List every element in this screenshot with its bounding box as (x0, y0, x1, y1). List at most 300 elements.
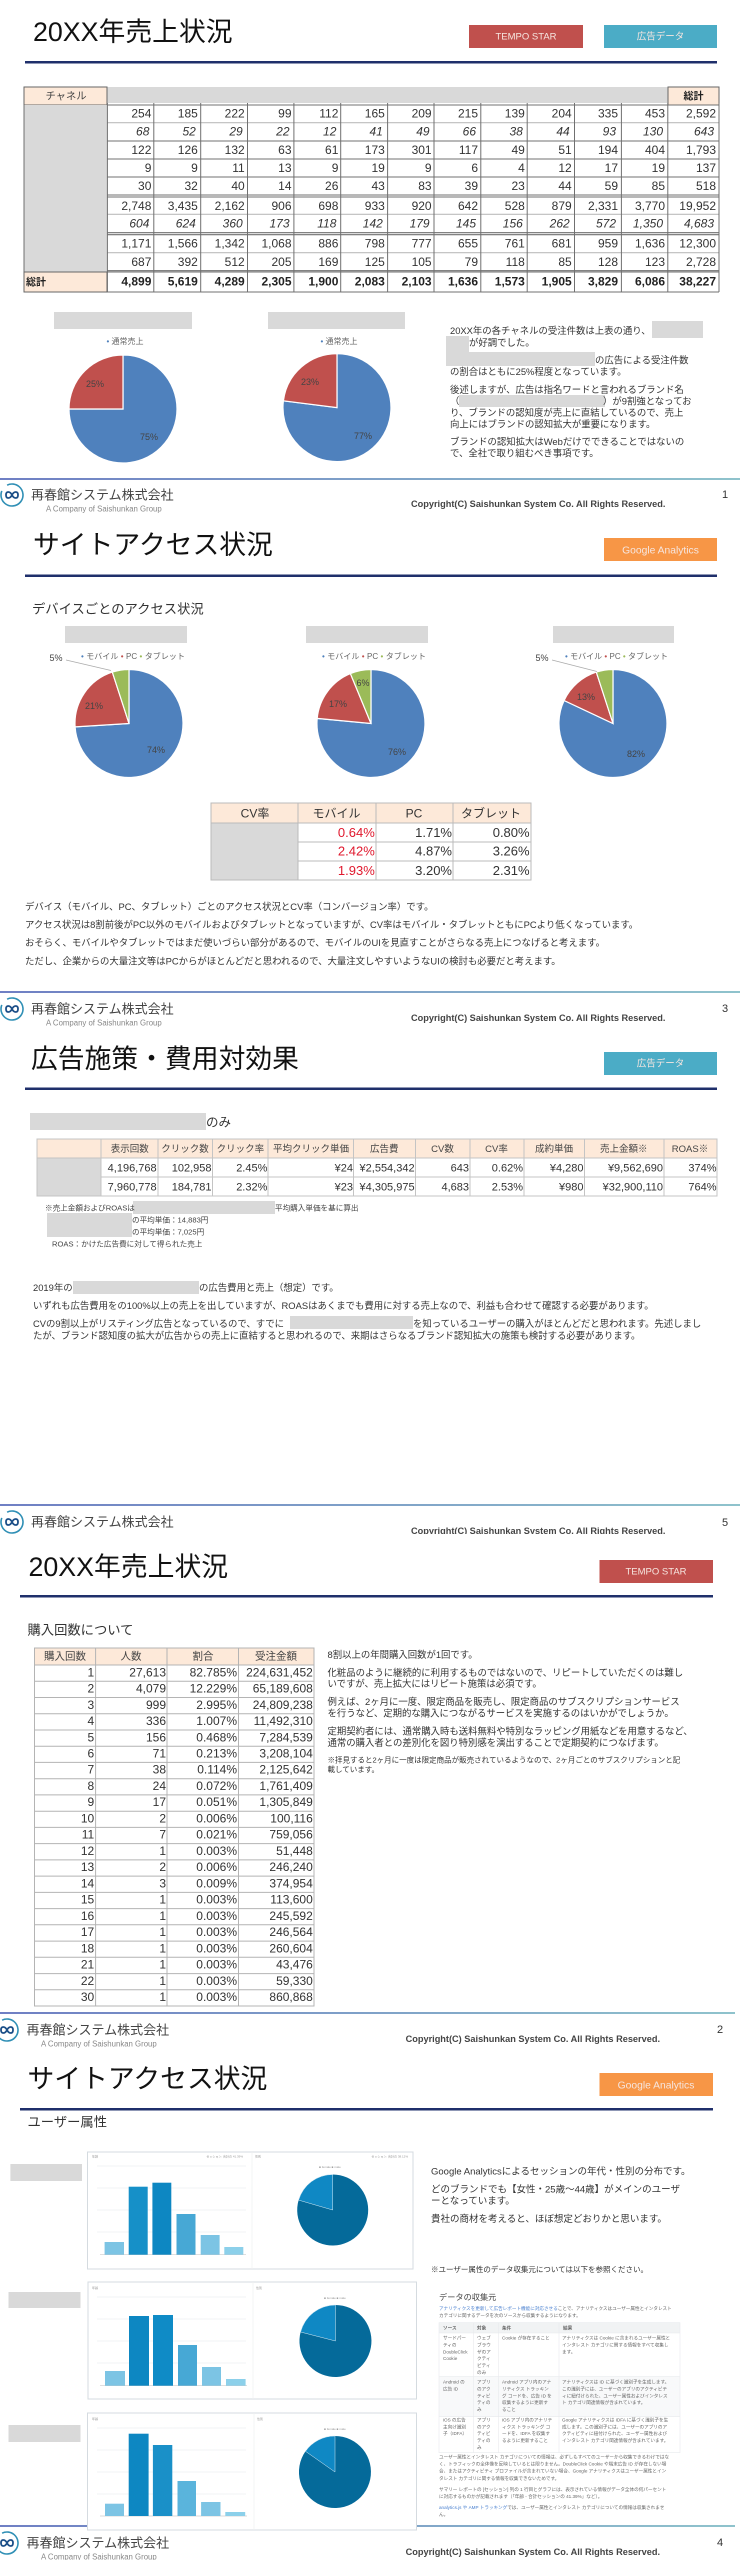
row 4 (145, 161, 716, 175)
row 9: 125 (365, 255, 385, 269)
row 7: 179 (410, 217, 430, 231)
panel: data collection sources: タレスト カテゴリに関する情報を収集できないためです。 (439, 2475, 559, 2482)
table: purchase count distribution: 113,600 (270, 1893, 313, 1907)
table: purchase count distribution: 購入回数 (44, 1650, 86, 1662)
analytics panel 2: 性別 (256, 2285, 262, 2290)
source table: ティビ (477, 2430, 491, 2437)
table: purchase count distribution: 71 (153, 1746, 166, 1760)
pie chart: device access 3: 5% (535, 653, 549, 663)
total row: 3,829 (588, 275, 618, 289)
pie chart: device access 2: 76% (388, 747, 406, 757)
table: purchase count distribution: 336 (146, 1714, 166, 1728)
row 1: 185 (178, 107, 198, 121)
commentary: repeat purchases: 定期契約者には、通常購入時も送料無料や特別なラッピング用紙などを用意するなど、 (328, 1726, 693, 1736)
analytics panel 3: ■ female ■ male (324, 2427, 346, 2431)
table: purchase count distribution: 21 (81, 1958, 95, 1972)
analytics panel 1 (88, 2152, 413, 2269)
total row: 38,227 (679, 275, 716, 289)
table: purchase count distribution: 6 (88, 1746, 95, 1760)
table: purchase count distribution: 0.003% (196, 1941, 237, 1955)
table footnotes: の平均単価：14,883円 (132, 1215, 208, 1225)
commentary: repeat purchases: を行うなど、定期的な購入につながるサービスを実施するのはいかがでしょうか。 (328, 1708, 674, 1718)
row 3: 61 (325, 143, 339, 157)
row 7: 624 (176, 217, 196, 231)
pie chart: left channel: 25% (86, 379, 104, 389)
table: purchase count distribution: 割合 (192, 1650, 214, 1662)
commentary: user attributes: どのブランドでも【女性・25歳～44歳】がメインのユーザ (431, 2183, 680, 2195)
row 2: 130 (643, 125, 663, 139)
table: CV rate by device: 2.31% (493, 863, 530, 878)
title: site access status: サイトアクセス状況 (28, 2064, 267, 2094)
commentary: ad results (33, 1281, 701, 1341)
table footnotes (45, 1201, 359, 1249)
commentary: device access: アクセス状況は8割前後がPC以外のモバイルおよびタブレットとなっていますが、CV率はモバイル・タブレットともにPCより低くなっています。 (25, 919, 638, 930)
commentary: repeat purchases: 例えば、2ヶ月に一度、限定商品を販売し、限定商品のサブスクリプションサービス (328, 1696, 680, 1707)
source table: 主向け識別 (443, 2423, 466, 2430)
commentary: ad results: いずれも広告費用をの100%以上の売上を出していますが、ROASはあくまでも費用に対する売上なので、利益も合わせて確認する必要があります。 (33, 1300, 654, 1311)
row 8: 1,636 (635, 237, 665, 251)
source table: ティの (477, 2400, 491, 2406)
table: purchase count distribution: 24 (153, 1779, 166, 1793)
row 7: 262 (549, 217, 570, 231)
note: data source reference: ※ユーザー属性のデータ収集元については以下を参照ください。 (431, 2264, 648, 2274)
total row: 1,905 (542, 275, 572, 289)
row 7: 1,350 (633, 217, 663, 231)
commentary: user attributes: ーとなっています。 (431, 2196, 515, 2207)
row 6: 698 (318, 199, 339, 213)
row 7: 173 (269, 217, 290, 231)
footer: company logo, page 3: 3 (722, 1003, 728, 1015)
table: CV rate by device: CV率 (241, 806, 269, 820)
row 6: 2,162 (215, 199, 245, 213)
panel: data collection sources: に対応するものかが記載されます（「年齢 - 合計セッションの 41.39%」など）。 (439, 2493, 602, 2500)
row 8: 798 (365, 237, 385, 251)
source table: アプリ (477, 2418, 491, 2424)
table: purchase count distribution: 260,604 (269, 1941, 313, 1955)
row 3: 63 (278, 143, 292, 157)
row 4: 137 (696, 161, 716, 175)
table: CV rate by device: 1.93% (338, 863, 375, 878)
table: ad performance: クリック率 (217, 1144, 264, 1155)
button: ad data: 広告データ (637, 30, 684, 42)
row 4: 19 (371, 161, 385, 175)
table: purchase count distribution: 7 (159, 1828, 166, 1842)
row 1: 222 (225, 107, 245, 121)
source table: ること (502, 2407, 516, 2412)
row 7: 572 (596, 217, 616, 231)
row 5 (138, 179, 716, 193)
row 7: 156 (503, 217, 523, 231)
commentary: user attributes (431, 2165, 691, 2225)
title: 20XX sales status: 20XX年売上状況 (28, 1552, 228, 1582)
gender pie (297, 2174, 368, 2246)
row 1: 112 (319, 107, 339, 121)
total row: 5,619 (168, 275, 198, 289)
row 3: 301 (412, 143, 432, 157)
table: purchase count distribution: 0.006% (196, 1860, 237, 1874)
source table: ます。 (562, 2348, 575, 2355)
source table: DoubleClick (443, 2349, 468, 2354)
table: purchase count distribution: 1 (159, 1844, 166, 1858)
source table: この識別子には、ユーザーのアプリのアクティビテ (562, 2386, 667, 2392)
table: ad performance: 7,960,778 (108, 1182, 157, 1194)
source table: ウェブ (477, 2335, 491, 2342)
row 5: 14 (278, 179, 292, 193)
commentary: device access (25, 901, 638, 967)
table: CV rate by device: 0.80% (493, 825, 530, 840)
footer: company logo, page 1: 1 (722, 489, 728, 501)
source table: 収集するように更新す (502, 2399, 548, 2406)
title: 20XX sales status: 20XX年売上状況 (33, 17, 233, 47)
age bars (105, 2183, 243, 2255)
footer: company logo, page 3 (0, 994, 728, 1028)
table: ad performance: クリック数 (161, 1143, 209, 1155)
footer: company logo, page 3: A Company of Saishunkan Group (46, 1018, 162, 1028)
row 5: 85 (652, 179, 665, 193)
table: purchase count distribution: 0.009% (196, 1876, 237, 1890)
table: ad performance: CV率 (485, 1144, 508, 1155)
row 6 (121, 199, 716, 213)
table: purchase count distribution: 18 (81, 1941, 95, 1955)
table header (24, 87, 719, 105)
row 2: 52 (182, 125, 196, 139)
row 6: 19,952 (679, 199, 716, 213)
source table: 結果 (563, 2325, 573, 2332)
total row: 2,305 (261, 275, 292, 289)
table: purchase count distribution: 3,208,104 (259, 1746, 313, 1760)
row 5: 32 (184, 179, 198, 193)
table: purchase count distribution: 2.995% (196, 1698, 237, 1712)
table: purchase count distribution: 1 (159, 1958, 166, 1972)
row 8 (121, 237, 716, 251)
row 9: 205 (271, 255, 292, 269)
table: purchase count distribution: 999 (146, 1698, 166, 1712)
footer: company logo, page 1: Copyright(C) Saishunkan System Co. All Rights Reserved. (411, 499, 665, 509)
total row (24, 272, 716, 292)
table: purchase count distribution: 0.003% (196, 1909, 237, 1923)
panel: data collection sources: く、トラフィックの全体像を反映しているとは限りません。DoubleClick Cookie や端末広告 ID が存在しない場 (439, 2460, 667, 2467)
commentary: repeat purchases: ※拝見すると2ヶ月に一度は限定商品が販売されているようなので、2ヶ月ごとのサブスクリプションと記 (328, 1755, 681, 1765)
row 5: 83 (418, 179, 432, 193)
row 5: 23 (511, 179, 525, 193)
row 7: 142 (363, 217, 383, 231)
heading: user attributes: ユーザー属性 (28, 2115, 107, 2130)
row 4: 9 (145, 161, 152, 175)
commentary: repeat purchases: 載しています。 (328, 1764, 379, 1774)
commentary: channel results: 20XX年の各チャネルの受注件数は上表の通り、 (450, 325, 651, 336)
table: ad performance: ¥980 (558, 1182, 584, 1194)
title: ad measures and cost effectiveness: 広告施策・費用対効果 (31, 1044, 299, 1074)
footer: company logo, page 5 (0, 1507, 728, 1540)
footer: company logo, page 4 (0, 2528, 723, 2560)
footer: company logo, page 2: 2 (717, 2024, 723, 2036)
row 9: 85 (558, 255, 572, 269)
analytics panel 1: 性別 (255, 2154, 261, 2158)
table: purchase count distribution: 16 (81, 1909, 95, 1923)
row 9: 2,728 (686, 255, 716, 269)
table: purchase count distribution: 0.051% (196, 1795, 237, 1809)
row 7: 604 (129, 217, 150, 231)
button: ad data (604, 1052, 717, 1075)
table: purchase count distribution: 24,809,238 (253, 1698, 313, 1712)
table: purchase count distribution: 人数 (120, 1650, 142, 1662)
row 7: 118 (317, 217, 337, 231)
row 3: 117 (459, 143, 478, 157)
table: ad performance: 102,958 (172, 1163, 212, 1175)
footer: company logo, page 5: Copyright(C) Saishunkan System Co. All Rights Reserved. (411, 1526, 665, 1536)
footer: company logo, page 3: Copyright(C) Saishunkan System Co. All Rights Reserved. (411, 1013, 665, 1023)
commentary: ad results: 2019年の (33, 1282, 73, 1293)
row 9 (131, 255, 716, 269)
table: purchase count distribution: 245,592 (269, 1909, 313, 1923)
table footnotes: の平均単価：7,025円 (132, 1227, 204, 1237)
commentary: channel results: が好調でした。 (469, 337, 535, 348)
source table: アナリティクスは Cookie に含まれるユーザー属性と (562, 2335, 670, 2342)
pie chart: left channel (54, 312, 192, 463)
table: ad performance: 2.53% (492, 1182, 523, 1194)
row 9: 79 (465, 255, 478, 269)
commentary: ad results: の広告費用と売上（想定）です。 (199, 1282, 339, 1293)
table: purchase count distribution: 17 (153, 1795, 166, 1809)
pie chart: device access 1 (49, 626, 187, 778)
table: purchase count distribution: 7 (88, 1763, 95, 1777)
footer: company logo, page 4: Copyright(C) Saishunkan System Co. All Rights Reserved. (406, 2547, 660, 2557)
title: site access status: サイトアクセス状況 (33, 530, 273, 560)
total row: 2,083 (355, 275, 385, 289)
row 9: 687 (131, 255, 152, 269)
row 1: 204 (552, 107, 572, 121)
row 3: 194 (598, 143, 618, 157)
table header: 総計 (684, 90, 704, 102)
row 6: 2,748 (121, 199, 152, 213)
source table: み (477, 2445, 482, 2451)
row 8: 12,300 (679, 237, 716, 251)
total row: 総計 (26, 276, 46, 288)
table: ad performance: 643 (451, 1163, 469, 1175)
table: purchase count distribution: 30 (81, 1990, 95, 2004)
table: ad performance: 764% (688, 1182, 717, 1194)
table: purchase count distribution: 1.007% (196, 1714, 237, 1728)
pie chart: right channel: • 通常売上 (320, 336, 358, 346)
table: ad performance: 表示回数 (111, 1143, 149, 1155)
footer: company logo, page 5: 5 (722, 1517, 728, 1529)
table: ad performance: 0.62% (492, 1163, 523, 1175)
commentary: repeat purchases: 8割以上の年間購入回数が1回です。 (328, 1649, 478, 1660)
pie chart: device access 1: • モバイル • PC • タブレット (81, 651, 185, 661)
table: purchase count distribution: 2 (159, 1860, 166, 1874)
footer: company logo, page 2: 再春館システム株式会社 (26, 2022, 169, 2038)
row 3 (131, 143, 716, 157)
row 9: 128 (598, 255, 618, 269)
table: ad performance: 4,683 (441, 1182, 469, 1194)
analytics panel 3: 性別 (257, 2416, 263, 2421)
heading: purchase count: 購入回数について (28, 1623, 133, 1638)
row 1: 209 (412, 107, 432, 121)
row 6: 3,770 (635, 199, 665, 213)
table: ad performance: ¥4,305,975 (359, 1182, 415, 1194)
table: purchase count distribution: 4 (88, 1714, 95, 1728)
table: ad performance: 374% (688, 1163, 717, 1175)
table: purchase count distribution: 1 (159, 1893, 166, 1907)
row 8: 681 (552, 237, 572, 251)
row 6: 933 (365, 199, 385, 213)
commentary: user attributes: 貴社の商材を考えると、ほぼ想定どおりかと思います。 (431, 2213, 667, 2225)
total row: 6,086 (635, 275, 665, 289)
row 5: 30 (138, 179, 152, 193)
source table: アプリ (477, 2380, 491, 2386)
row 6: 3,435 (168, 199, 198, 213)
row 4: 13 (278, 161, 292, 175)
table: purchase count distribution: 246,564 (269, 1925, 313, 1939)
table: purchase count distribution: 1 (159, 1974, 166, 1988)
redacted row labels (24, 105, 107, 272)
panel: data collection sources: カテゴリに関するデータを次のソースから収集するようになります。 (439, 2312, 581, 2319)
row 4: 9 (191, 161, 198, 175)
commentary: ad results: CVの9割以上がリスティング広告となっているので、すでに (33, 1318, 284, 1329)
source table: 成します。この識別子には、ユーザーのアプリのア (562, 2423, 668, 2430)
row 2: 12 (323, 125, 337, 139)
row 5: 40 (231, 179, 245, 193)
analytics panel 1: 年齢 (92, 2154, 98, 2158)
table: purchase count distribution: 374,954 (269, 1876, 313, 1890)
total row: 4,899 (121, 275, 152, 289)
row 1: 215 (458, 107, 478, 121)
pie chart: device access 3: 13% (577, 692, 595, 702)
subheading: redacted brand only: のみ (206, 1116, 231, 1130)
row 3: 404 (645, 143, 665, 157)
source table: み (477, 2407, 482, 2413)
button: Google Analytics (600, 2073, 713, 2096)
footer: company logo, page 1: 再春館システム株式会社 (31, 488, 174, 502)
row 7 (129, 217, 714, 231)
button: TEMPO STAR: TEMPO STAR (625, 1566, 687, 1578)
table footnotes: ※売上金額およびROASは (45, 1203, 135, 1213)
footer: company logo, page 2: Copyright(C) Saishunkan System Co. All Rights Reserved. (406, 2034, 660, 2044)
redacted label 2 (8, 2292, 80, 2308)
panel: data collection sources: ん。 (439, 2512, 448, 2518)
commentary: channel results: の広告による受注件数 (595, 354, 689, 366)
table: purchase count distribution: 10 (81, 1812, 95, 1826)
table: ad performance: ¥4,280 (549, 1163, 584, 1175)
table: CV rate by device (211, 803, 531, 880)
table: purchase count distribution: 156 (146, 1730, 166, 1744)
table: ad performance: CV数 (431, 1143, 454, 1155)
table: purchase count distribution: 0.003% (196, 1958, 237, 1972)
table: purchase count distribution: 1,761,409 (259, 1779, 313, 1793)
row 7: 360 (223, 217, 243, 231)
table: purchase count distribution: 759,056 (269, 1828, 313, 1842)
row 5: 43 (371, 179, 385, 193)
table: purchase count distribution: 1 (88, 1665, 95, 1679)
source table (439, 2323, 680, 2453)
gender pie (299, 2305, 371, 2377)
commentary: channel results (446, 321, 703, 458)
panel: data collection sources: 合、またはアクティビティ プロファイルが含まれていない場合、Google アナリティクスはユーザー属性とイン (439, 2468, 667, 2474)
row 5: 26 (325, 179, 339, 193)
table: ad performance: ¥24 (334, 1163, 353, 1175)
table: ad performance: ROAS※ (672, 1144, 708, 1155)
source table: インタレスト カテゴリに関する情報をすべて収集し (562, 2342, 669, 2348)
source table: リティクス トラッキン (502, 2386, 549, 2392)
row 9: 169 (318, 255, 339, 269)
row 4: 17 (605, 161, 618, 175)
table: ad performance: 成約単価 (535, 1143, 573, 1155)
source table: Google アナリティクスは IDFA に基づく識別子を生 (562, 2416, 669, 2424)
button: Google Analytics (604, 538, 717, 561)
table: ad performance: 184,781 (172, 1182, 212, 1194)
button: Google Analytics: Google Analytics (618, 2080, 694, 2092)
table: purchase count distribution: 3 (159, 1876, 166, 1890)
source table: のみ (477, 2370, 487, 2376)
row 2: 44 (556, 125, 570, 139)
table: ad performance: 2.32% (236, 1182, 268, 1194)
analytics panel 1: セッション: 合計の 41.39% (206, 2154, 243, 2158)
row 8: 1,566 (168, 237, 198, 251)
source table: サードパー (443, 2336, 466, 2342)
table: purchase count distribution: 38 (153, 1763, 166, 1777)
table: purchase count distribution: 0.003% (196, 1844, 237, 1858)
commentary: user attributes: Google Analyticsによるセッションの年代・性別の分布です。 (431, 2165, 691, 2177)
table: purchase count distribution: 11 (82, 1828, 95, 1842)
row 9: 118 (506, 255, 525, 269)
button: TEMPO STAR (469, 25, 583, 48)
table: ad performance: 4,196,768 (108, 1163, 157, 1175)
table: purchase count distribution: 12 (81, 1844, 95, 1858)
gender pie (299, 2436, 371, 2508)
source table: 対象 (477, 2325, 487, 2332)
commentary: ad results: たが、ブランド認知度の拡大が広告からの売上に直結すると思われるので、来期はさらなるブランド認知拡大の施策も検討する必要があります。 (33, 1330, 640, 1341)
table: purchase count distribution: 13 (81, 1860, 95, 1874)
analytics panel 1: セッション: 合計の 38.12% (371, 2154, 408, 2158)
source table: ザのア (477, 2349, 491, 2355)
footer: company logo, page 4: 再春館システム株式会社 (26, 2536, 169, 2550)
source table: ィに紐付けられた、ユーザー属性およびインタレス (562, 2392, 668, 2399)
row 8: 959 (598, 237, 618, 251)
row 1: 2,592 (686, 107, 716, 121)
row 8: 1,171 (121, 237, 152, 251)
table: purchase count distribution: 82.785% (190, 1665, 237, 1679)
commentary: repeat purchases: いですが、売上拡大にはリピート施策は必須です。 (328, 1678, 542, 1689)
commentary: channel results: （ (450, 395, 459, 406)
pie chart: device access 1: 21% (85, 701, 103, 711)
button: ad data: 広告データ (637, 1058, 684, 1070)
pie chart: device access 1: 74% (147, 745, 165, 755)
footer: company logo, page 3: 再春館システム株式会社 (31, 1002, 174, 1016)
table: purchase count distribution: 8 (88, 1779, 95, 1793)
pie chart: device access 3: 82% (627, 749, 645, 759)
panel: data collection sources (439, 2292, 680, 2518)
table: purchase count distribution: 0.003% (196, 1893, 237, 1907)
age bars (105, 2434, 245, 2516)
source table: ト カテゴリ関連情報が含まれています。 (562, 2399, 645, 2406)
commentary: channel results: 後述しますが、広告は指名ワードと言われるブランド名 (450, 384, 684, 395)
commentary: channel results: り、ブランドの認知度が売上に直結しているので、売上 (450, 407, 683, 418)
pie chart: device access 2: • モバイル • PC • タブレット (322, 651, 426, 661)
source table: ビティ (477, 2362, 491, 2369)
panel: data collection sources: analytics.js や AMP トラッキングでは、ユーザー属性とインタレスト カテゴリについての情報は収集されませ (439, 2504, 665, 2511)
row 6: 528 (505, 199, 525, 213)
source table: ティの (477, 2438, 491, 2444)
analytics panel 2: ■ female ■ male (324, 2296, 346, 2300)
pie chart: device access 1: 5% (49, 653, 63, 663)
table: purchase count distribution: 9 (88, 1795, 95, 1809)
total row: 4,289 (215, 275, 245, 289)
row 4: 12 (558, 161, 572, 175)
footer: company logo, page 1: A Company of Saishunkan Group (46, 504, 162, 514)
commentary: ad results: を知っているユーザーの購入がほとんどだと思われます。先述しまし (413, 1318, 701, 1329)
table: ad performance: ¥32,900,110 (602, 1182, 663, 1194)
table: purchase count distribution: 860,868 (269, 1990, 313, 2004)
